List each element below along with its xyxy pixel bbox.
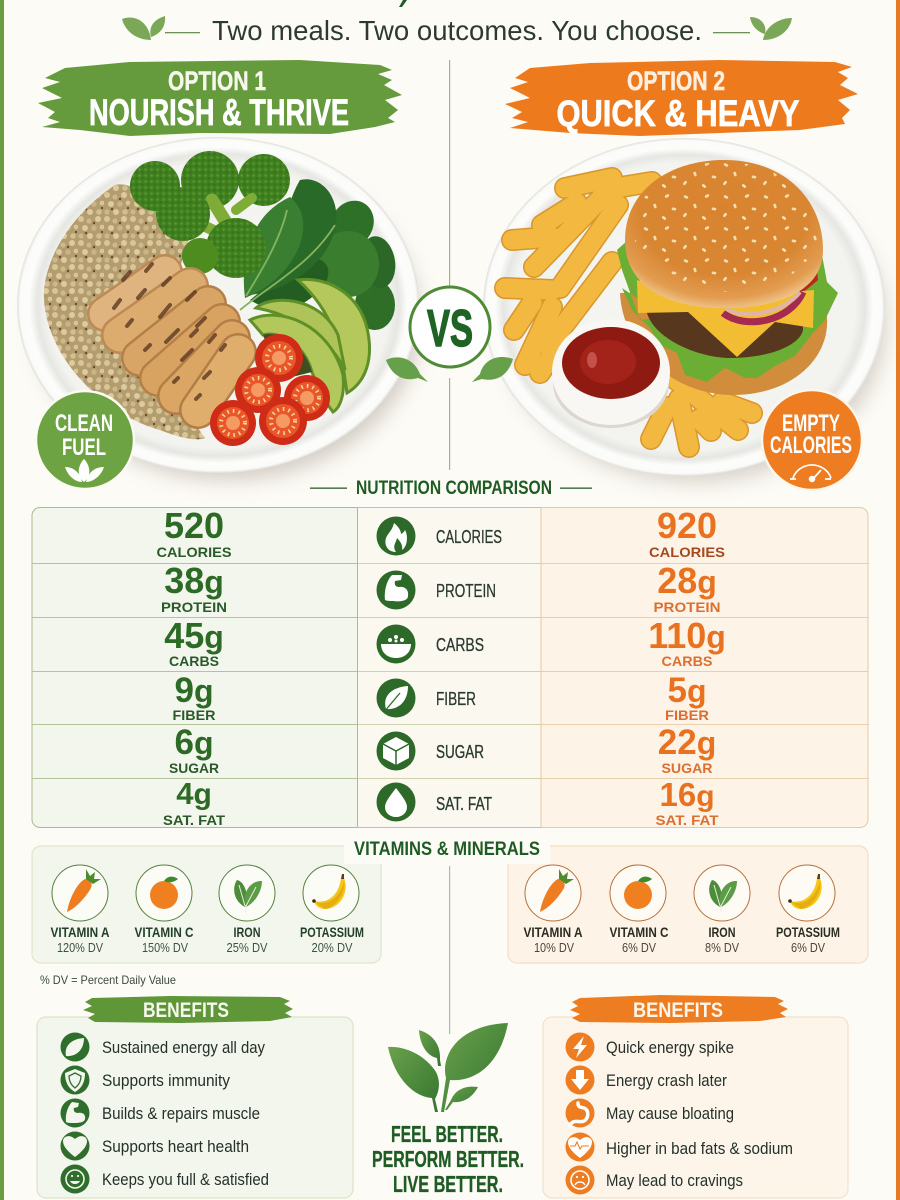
vitamin C xyxy=(610,865,668,955)
drawback: bad fats xyxy=(566,1132,793,1162)
french fries xyxy=(505,178,752,447)
center divider top xyxy=(449,60,450,290)
protein 28g: 28g xyxy=(657,560,717,601)
option 1 banner xyxy=(38,60,402,136)
benefit: immunity xyxy=(60,1066,230,1094)
badge text line 2: CALORIES xyxy=(770,432,852,459)
fiber 9g: FIBER xyxy=(172,707,216,723)
panel background xyxy=(37,1017,353,1198)
VS badge xyxy=(386,287,513,382)
plate shadow xyxy=(36,164,420,480)
drawback: bloating xyxy=(566,1098,734,1128)
benefit: muscle xyxy=(60,1098,260,1128)
left subtitle rule xyxy=(165,32,200,33)
icon: fiber leaf xyxy=(376,678,416,718)
icon: saturated fat drop xyxy=(376,782,416,822)
icon: left leaf sprig xyxy=(122,16,165,40)
benefit: sustained energy: Sustained energy all day xyxy=(102,1038,265,1057)
icon: sugar cube xyxy=(376,732,416,770)
benefit: satisfied: Keeps you full & satisfied xyxy=(102,1170,269,1189)
benefit: sustained energy xyxy=(60,1032,265,1062)
potassium xyxy=(776,865,840,955)
left green edge bar xyxy=(0,0,4,1200)
label sugar: SUGAR xyxy=(436,742,484,762)
benefit: heart: Supports heart health xyxy=(102,1137,249,1156)
subtitle row xyxy=(122,15,792,46)
cheese slice xyxy=(637,280,814,357)
sat fat 4g xyxy=(163,776,225,828)
fiber 9g xyxy=(172,671,216,723)
drawback: energy crash xyxy=(566,1066,727,1094)
icon: gauge xyxy=(790,465,831,481)
bottom bun xyxy=(620,290,827,395)
heading rule right xyxy=(560,488,592,489)
carbs 110g: 110g xyxy=(648,615,726,656)
vitamin C xyxy=(134,865,194,955)
vitamin A: 120% DV xyxy=(57,940,103,955)
benefit: satisfied xyxy=(60,1164,269,1194)
badge text line 1: CLEAN xyxy=(55,410,113,437)
heading rule left xyxy=(310,488,347,489)
sugar 6g xyxy=(169,723,219,776)
fiber 5g: FIBER xyxy=(665,707,709,723)
option 2 banner xyxy=(505,60,858,136)
right subtitle rule xyxy=(713,32,750,33)
sat fat 16g: SAT. FAT xyxy=(656,812,719,828)
drawback: bad fats: Higher in bad fats & sodium xyxy=(606,1139,793,1158)
badge circle xyxy=(36,391,134,489)
label carbs: CARBS xyxy=(436,635,484,655)
iron: IRON xyxy=(708,924,736,940)
drawback: energy spike xyxy=(566,1032,734,1062)
protein 38g: 38g xyxy=(164,560,224,601)
broccoli xyxy=(130,151,290,278)
sat fat 4g: 4g xyxy=(176,776,212,811)
heading text: NUTRITION COMPARISON xyxy=(356,478,552,499)
potassium xyxy=(300,865,364,955)
drawback: energy spike: Quick energy spike xyxy=(606,1038,734,1057)
drawback: cravings: May lead to cravings xyxy=(606,1171,743,1190)
potassium: 20% DV xyxy=(312,940,353,955)
label sat fat: SAT. FAT xyxy=(436,794,492,814)
heading backing xyxy=(344,838,550,864)
icon: calories flame xyxy=(376,516,416,556)
calories 520: CALORIES xyxy=(156,544,232,560)
protein 38g xyxy=(161,560,227,615)
grilled chicken slices xyxy=(105,264,238,410)
badge text line 2: FUEL xyxy=(62,434,106,461)
drawback: cravings xyxy=(566,1166,743,1194)
onion inner xyxy=(726,292,800,314)
heading text: VITAMINS & MINERALS xyxy=(354,839,540,860)
avocado slices xyxy=(250,279,370,412)
carbs 110g: CARBS xyxy=(662,653,712,669)
icon: right leaf xyxy=(472,357,513,382)
calories 520 xyxy=(156,505,232,560)
orange brush stroke xyxy=(505,60,858,136)
benefits heading: BENEFITS xyxy=(633,999,723,1022)
icon: carbs bowl xyxy=(376,624,416,664)
middle column background xyxy=(357,508,541,828)
badge text line 1: EMPTY xyxy=(782,410,840,437)
white plate xyxy=(483,138,885,476)
beef patty xyxy=(647,295,803,358)
white plate xyxy=(17,137,419,473)
protein 38g: PROTEIN xyxy=(161,599,227,615)
left column values xyxy=(156,505,232,828)
option label: OPTION 2 xyxy=(627,66,725,96)
quinoa xyxy=(44,184,205,439)
vitamins panel right xyxy=(508,846,868,963)
red tomato layer xyxy=(635,262,818,305)
icon: right leaf sprig xyxy=(750,17,792,40)
potassium: 6% DV xyxy=(791,940,825,955)
sesame seeds xyxy=(630,162,820,292)
vitamin A: VITAMIN A xyxy=(524,924,582,940)
option name: NOURISH & THRIVE xyxy=(89,92,349,133)
drawback: energy crash: Energy crash later xyxy=(606,1071,727,1090)
vitamin C: VITAMIN C xyxy=(134,924,194,940)
nutrition table xyxy=(32,505,868,828)
tagline line 1: FEEL BETTER. xyxy=(391,1121,503,1147)
center closing message xyxy=(372,1023,524,1197)
daily value footnote: % DV = Percent Daily Value xyxy=(40,973,176,987)
calories 920: 920 xyxy=(657,505,717,546)
sugar 6g: SUGAR xyxy=(169,760,219,776)
label protein: PROTEIN xyxy=(436,581,496,601)
empty calories badge xyxy=(762,390,862,490)
benefits panel right xyxy=(543,995,848,1198)
center divider bottom xyxy=(449,866,450,1034)
option label: OPTION 1 xyxy=(168,66,266,96)
right column values xyxy=(648,505,726,828)
potassium: POTASSIUM xyxy=(776,924,840,940)
clean fuel badge xyxy=(36,391,134,489)
option name: QUICK & HEAVY xyxy=(556,93,800,134)
cherry tomatoes xyxy=(210,334,330,446)
sat fat 16g xyxy=(656,776,719,828)
calories 520: 520 xyxy=(164,505,224,546)
tagline line 2: PERFORM BETTER. xyxy=(372,1146,524,1172)
icon: protein muscle xyxy=(376,570,416,610)
right orange edge bar xyxy=(896,0,900,1200)
tagline line 3: LIVE BETTER. xyxy=(393,1171,503,1197)
VS label: VS xyxy=(427,300,473,358)
iron xyxy=(219,865,275,955)
vitamins panel left xyxy=(32,846,381,963)
benefits panel left xyxy=(37,996,353,1198)
plate shadow xyxy=(502,166,886,482)
icon: large leaf sprig xyxy=(388,1023,508,1112)
subtitle text: Two meals. Two outcomes. You choose. xyxy=(212,15,702,46)
iron: 8% DV xyxy=(705,940,739,955)
fiber 9g: 9g xyxy=(174,671,214,710)
iron xyxy=(694,865,750,955)
sesame bun xyxy=(625,160,823,308)
healthy plate xyxy=(17,137,420,480)
vitamins heading xyxy=(344,838,550,864)
green brush stroke xyxy=(38,60,402,136)
label calories: CALORIES xyxy=(436,527,502,547)
sugar 22g: SUGAR xyxy=(662,760,712,776)
badge circle xyxy=(410,287,490,367)
cropped title remnant xyxy=(399,0,407,7)
icon: left leaf xyxy=(386,357,428,382)
benefit: muscle: Builds & repairs muscle xyxy=(102,1104,260,1123)
vitamin A: VITAMIN A xyxy=(50,924,110,940)
onion ring xyxy=(723,292,803,322)
sat fat 4g: SAT. FAT xyxy=(163,812,225,828)
calories 920 xyxy=(649,505,725,560)
green brush header xyxy=(83,996,293,1023)
right column background xyxy=(541,508,868,828)
vitamin C: 6% DV xyxy=(622,940,656,955)
icon: sprout xyxy=(65,459,104,482)
iron: IRON xyxy=(234,924,260,940)
badge circle xyxy=(762,390,862,490)
panel background xyxy=(543,1017,848,1198)
fiber 5g: 5g xyxy=(667,671,707,710)
vitamin C: 150% DV xyxy=(142,940,188,955)
benefit: heart xyxy=(60,1132,249,1160)
benefits heading: BENEFITS xyxy=(143,999,229,1022)
ketchup bowl xyxy=(552,319,670,428)
fiber 5g xyxy=(665,671,709,723)
benefit: immunity: Supports immunity xyxy=(102,1071,230,1090)
potassium: POTASSIUM xyxy=(300,924,364,940)
sat fat 16g: 16g xyxy=(659,776,715,813)
drawback: bloating: May cause bloating xyxy=(606,1104,734,1123)
indulgent plate xyxy=(483,138,886,482)
carbs 45g: 45g xyxy=(164,615,224,656)
calories 920: CALORIES xyxy=(649,544,725,560)
center divider lower xyxy=(449,378,450,470)
panel background xyxy=(32,846,381,963)
protein 28g: PROTEIN xyxy=(654,599,720,615)
sugar 6g: 6g xyxy=(174,723,214,762)
left column background xyxy=(32,508,357,828)
vitamin A xyxy=(524,865,582,955)
vitamin A: 10% DV xyxy=(534,940,574,955)
protein 28g xyxy=(654,560,720,615)
orange brush header xyxy=(570,995,788,1023)
label fiber: FIBER xyxy=(436,689,476,709)
middle column labels xyxy=(376,516,502,822)
panel background xyxy=(508,846,868,963)
spinach leaves xyxy=(240,179,399,330)
vitamin C: VITAMIN C xyxy=(610,924,668,940)
iron: 25% DV xyxy=(226,940,268,955)
carbs 45g: CARBS xyxy=(169,653,219,669)
burger xyxy=(617,160,838,395)
vitamin A xyxy=(50,865,110,955)
lettuce xyxy=(617,240,838,382)
sugar 22g: 22g xyxy=(658,723,716,762)
